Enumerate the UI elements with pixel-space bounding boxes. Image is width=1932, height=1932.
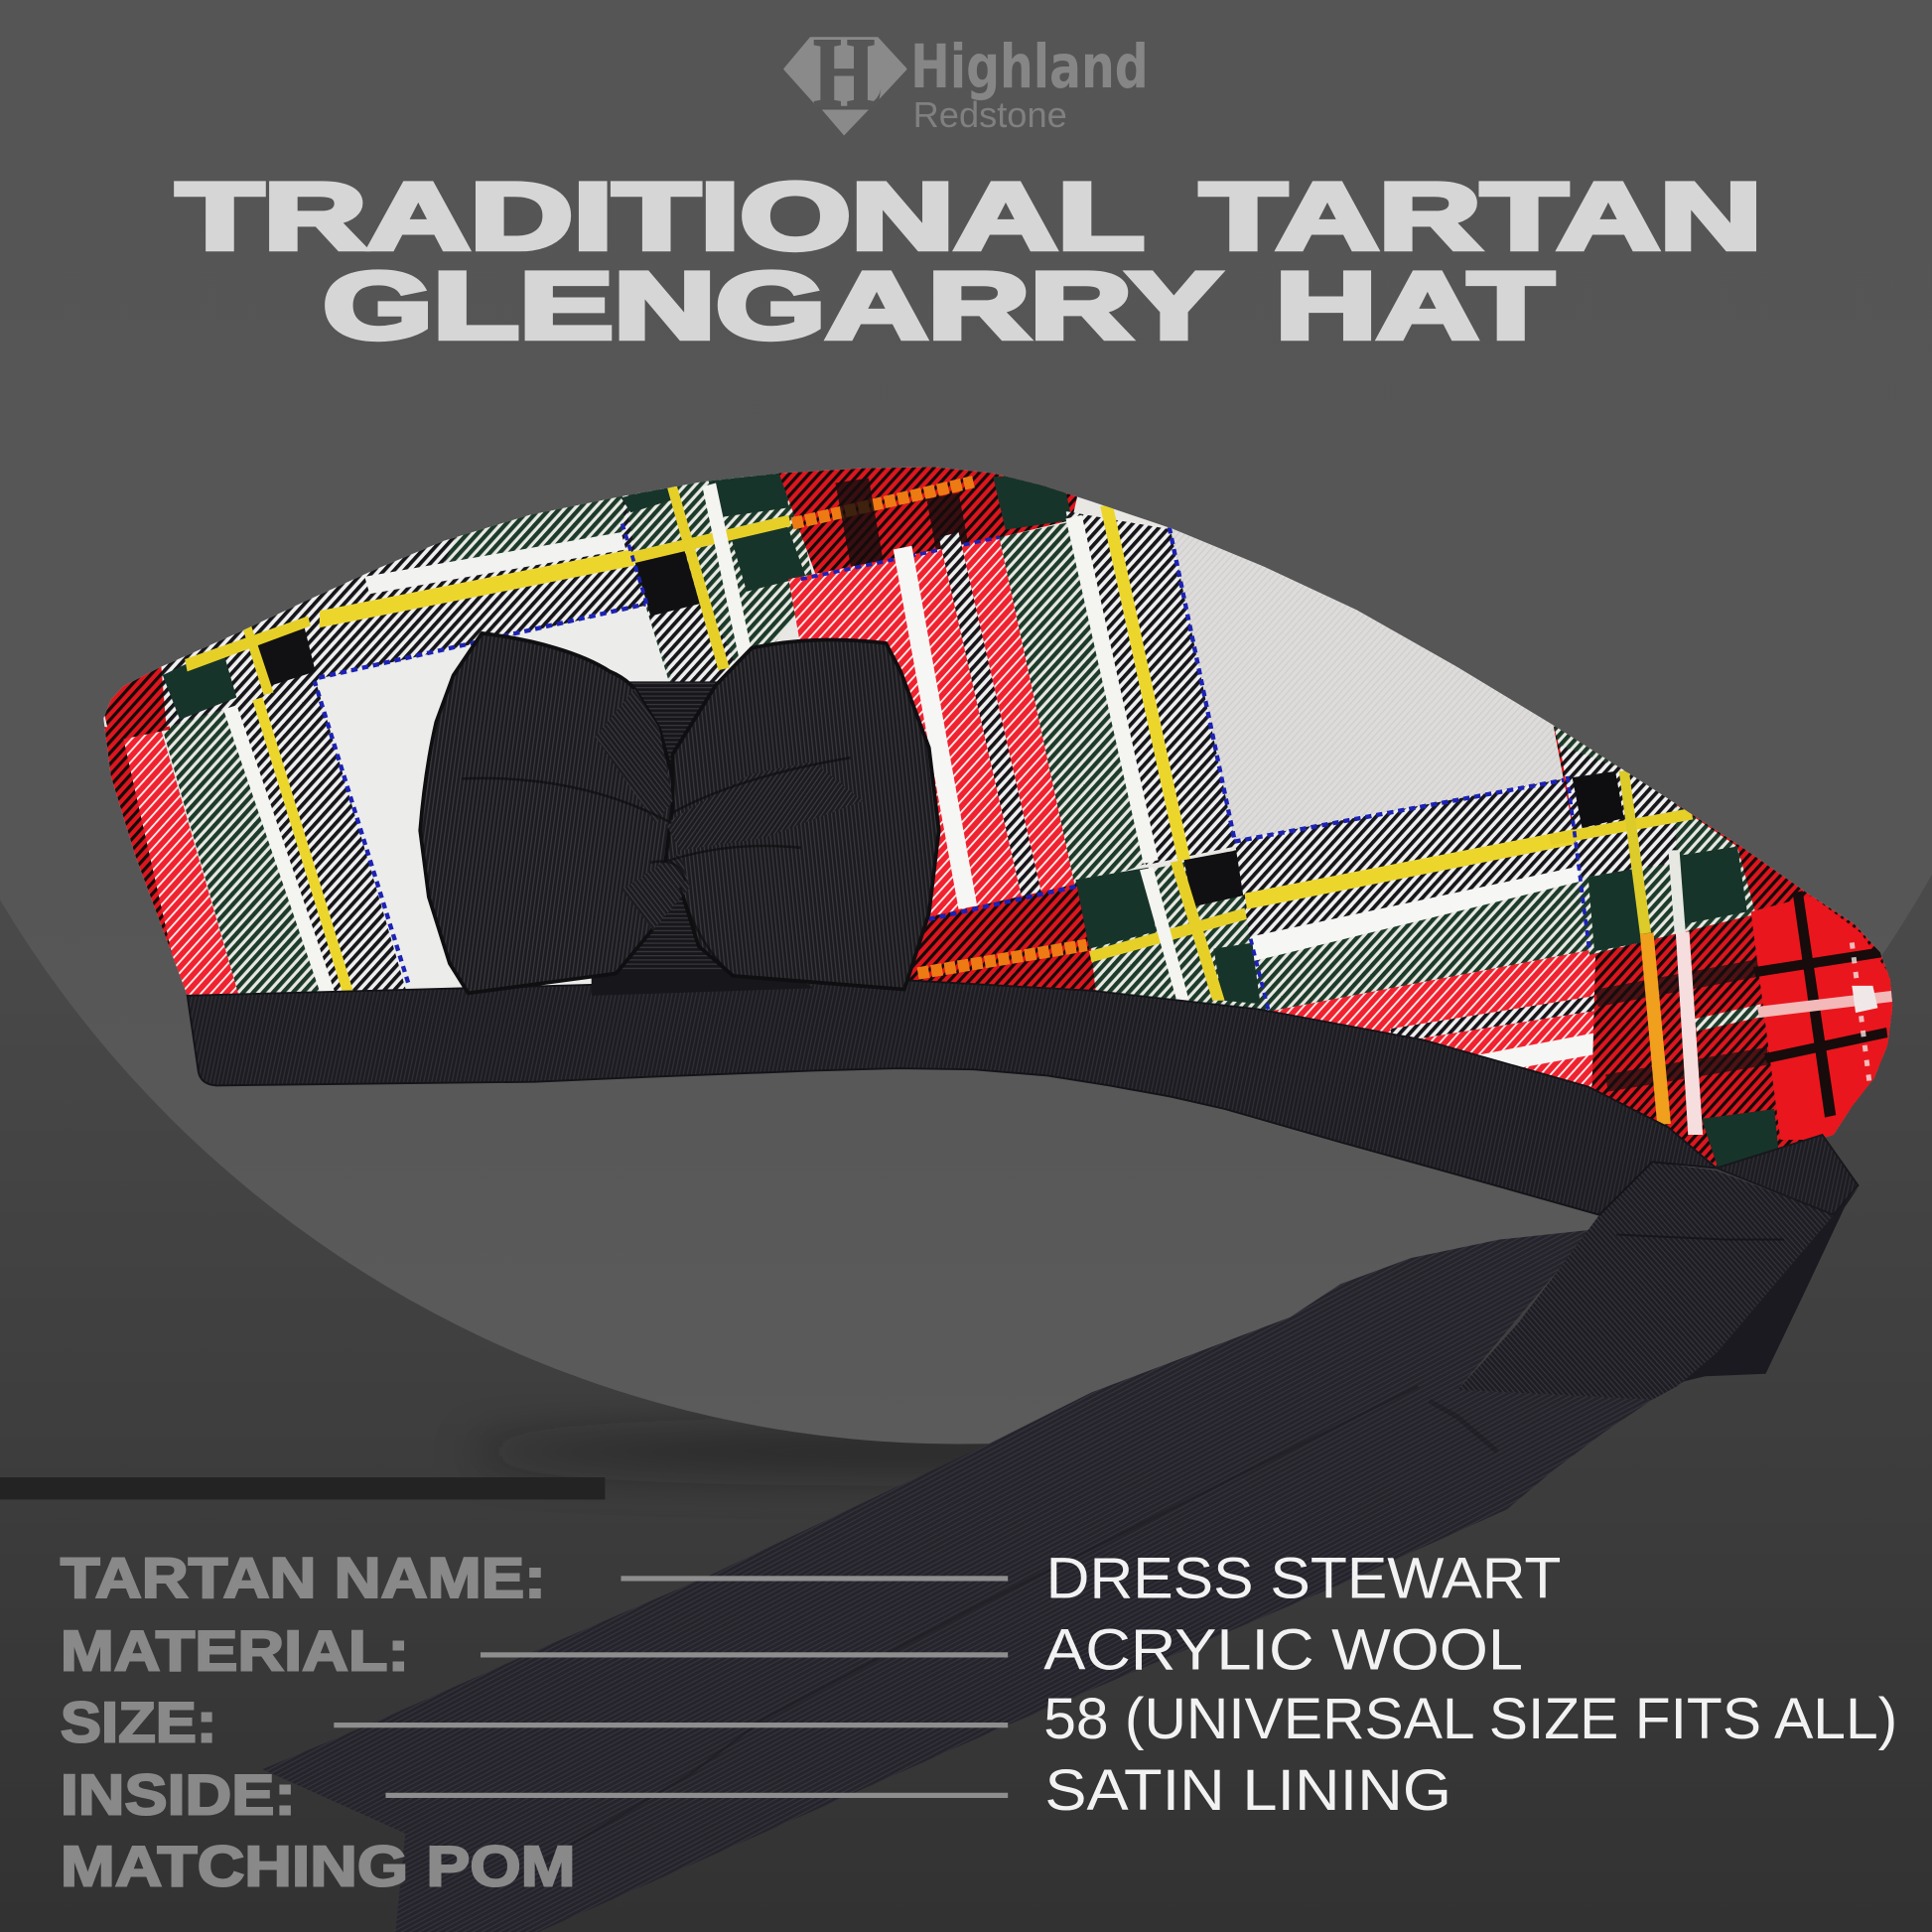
large white panel xyxy=(1170,523,1569,840)
title xyxy=(176,164,1762,359)
spec values: 58 (UNIVERSAL SIZE FITS ALL) xyxy=(1043,1687,1897,1751)
dark accent bar xyxy=(0,1477,605,1499)
lower central crossing xyxy=(909,850,1275,1011)
spec values: SATIN LINING xyxy=(1044,1758,1451,1823)
hat xyxy=(73,444,1922,1215)
central vertical stripes xyxy=(788,504,1247,921)
connector lines xyxy=(334,1576,1008,1798)
logo wordmark: Highland xyxy=(910,33,1149,102)
right tartan end xyxy=(1549,721,1897,1182)
spec labels: MATCHING POM xyxy=(61,1835,576,1898)
spec values xyxy=(1043,1547,1897,1823)
bow left wing xyxy=(420,633,680,993)
knot at band end xyxy=(1717,1135,1859,1215)
upper horizontal stripes xyxy=(296,486,653,986)
hat band xyxy=(188,980,1717,1215)
title: TRADITIONAL xyxy=(176,164,1145,270)
spec values: ACRYLIC WOOL xyxy=(1043,1618,1523,1683)
ribbon tails xyxy=(262,1162,1859,1932)
title: HAT xyxy=(1276,253,1554,359)
bow xyxy=(420,633,939,996)
right horizontal stripes xyxy=(1234,778,1596,1088)
left white panel xyxy=(316,680,409,989)
bow centre strap xyxy=(604,681,727,976)
bow upper pleats xyxy=(595,689,863,930)
bow lower shadow xyxy=(592,971,813,996)
spec labels xyxy=(61,1547,576,1898)
icon: diamond monogram: H xyxy=(813,20,875,128)
title: TARTAN xyxy=(1200,164,1762,270)
spec labels: TARTAN NAME: xyxy=(61,1547,546,1610)
top red crossing xyxy=(778,467,1077,574)
icon: diamond monogram xyxy=(785,20,905,136)
title: GLENGARRY xyxy=(323,253,1221,359)
tartan crown xyxy=(73,444,1922,1182)
bow knot folds xyxy=(462,758,850,976)
spec labels: INSIDE: xyxy=(61,1763,296,1827)
bow right wing xyxy=(665,639,939,990)
logo: Highland Redstone xyxy=(785,20,1149,136)
spec labels: SIZE: xyxy=(61,1691,216,1754)
left vertical stripes xyxy=(104,681,406,995)
central crossing xyxy=(621,473,812,681)
spec values: DRESS STEWART xyxy=(1046,1547,1561,1611)
logo wordmark xyxy=(910,33,1149,135)
logo wordmark: Redstone xyxy=(913,94,1067,135)
spec labels: MATERIAL: xyxy=(61,1619,409,1683)
left crossing xyxy=(98,592,321,742)
